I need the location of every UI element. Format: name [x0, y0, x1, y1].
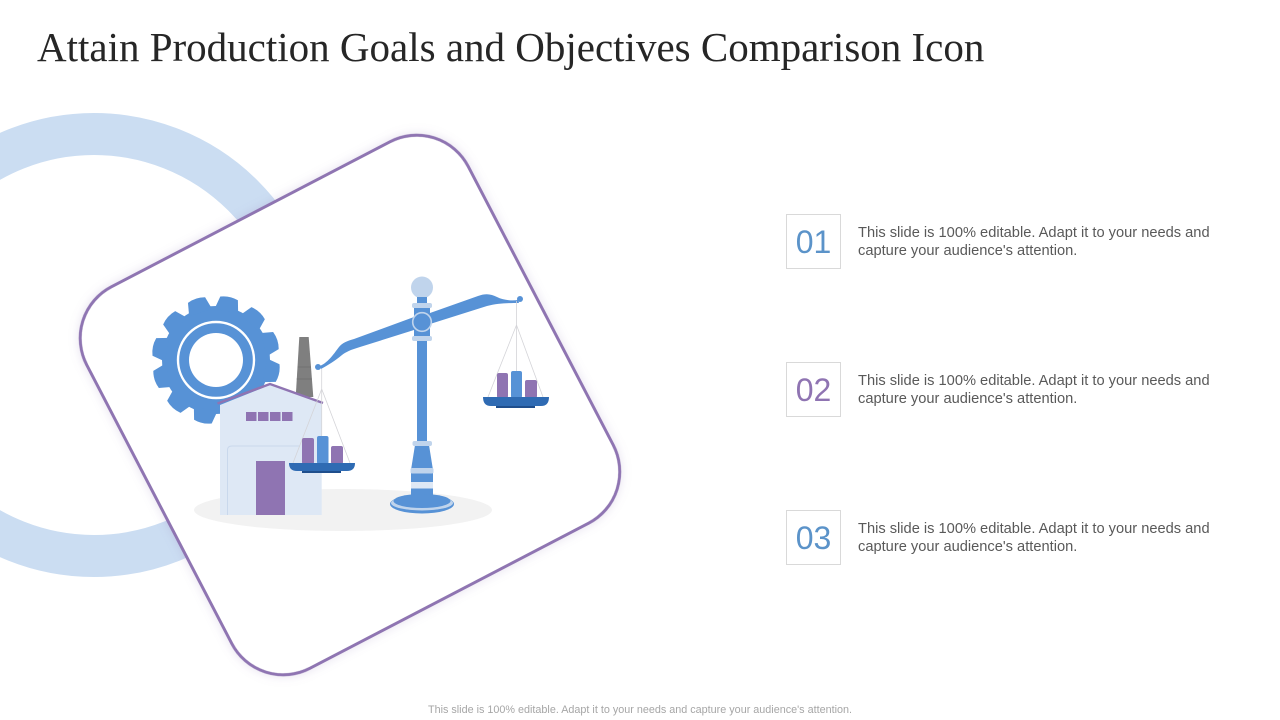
icon: gear: [150, 294, 282, 426]
number badge 03: 03: [796, 520, 831, 556]
text block 03: [858, 521, 1210, 555]
footer note: This slide is 100% editable. Adapt it to your needs and capture your audience's attention.: [428, 704, 852, 716]
text block 03: This slide is 100% editable. Adapt it to your needs and: [858, 521, 1210, 537]
text block 01: This slide is 100% editable. Adapt it to your needs and: [858, 225, 1210, 241]
text block 02: capture your audience's attention.: [858, 391, 1077, 407]
number badge 03: [786, 510, 841, 565]
text block 03: capture your audience's attention.: [858, 539, 1077, 555]
title: Attain Production Goals and Objectives Comparison Icon: [37, 24, 984, 70]
text block 01: capture your audience's attention.: [858, 243, 1077, 259]
icon: factory building: [218, 384, 323, 515]
number badge 02: [786, 362, 841, 417]
number badge 01: 01: [796, 224, 831, 260]
rotated rounded card: [60, 115, 640, 695]
icon: chimney: [296, 337, 313, 397]
icon: left pan with bars: [289, 369, 355, 473]
decorative ring: [0, 134, 305, 556]
text block 02: [858, 373, 1210, 407]
text block 01: [858, 225, 1210, 259]
number badge 01: [786, 214, 841, 269]
number badge 02: 02: [796, 372, 831, 408]
icon: right pan with bars: [483, 301, 549, 408]
icon: balance scale stand: [315, 276, 523, 514]
text block 02: This slide is 100% editable. Adapt it to your needs and: [858, 373, 1210, 389]
ground shadow: [194, 489, 492, 531]
